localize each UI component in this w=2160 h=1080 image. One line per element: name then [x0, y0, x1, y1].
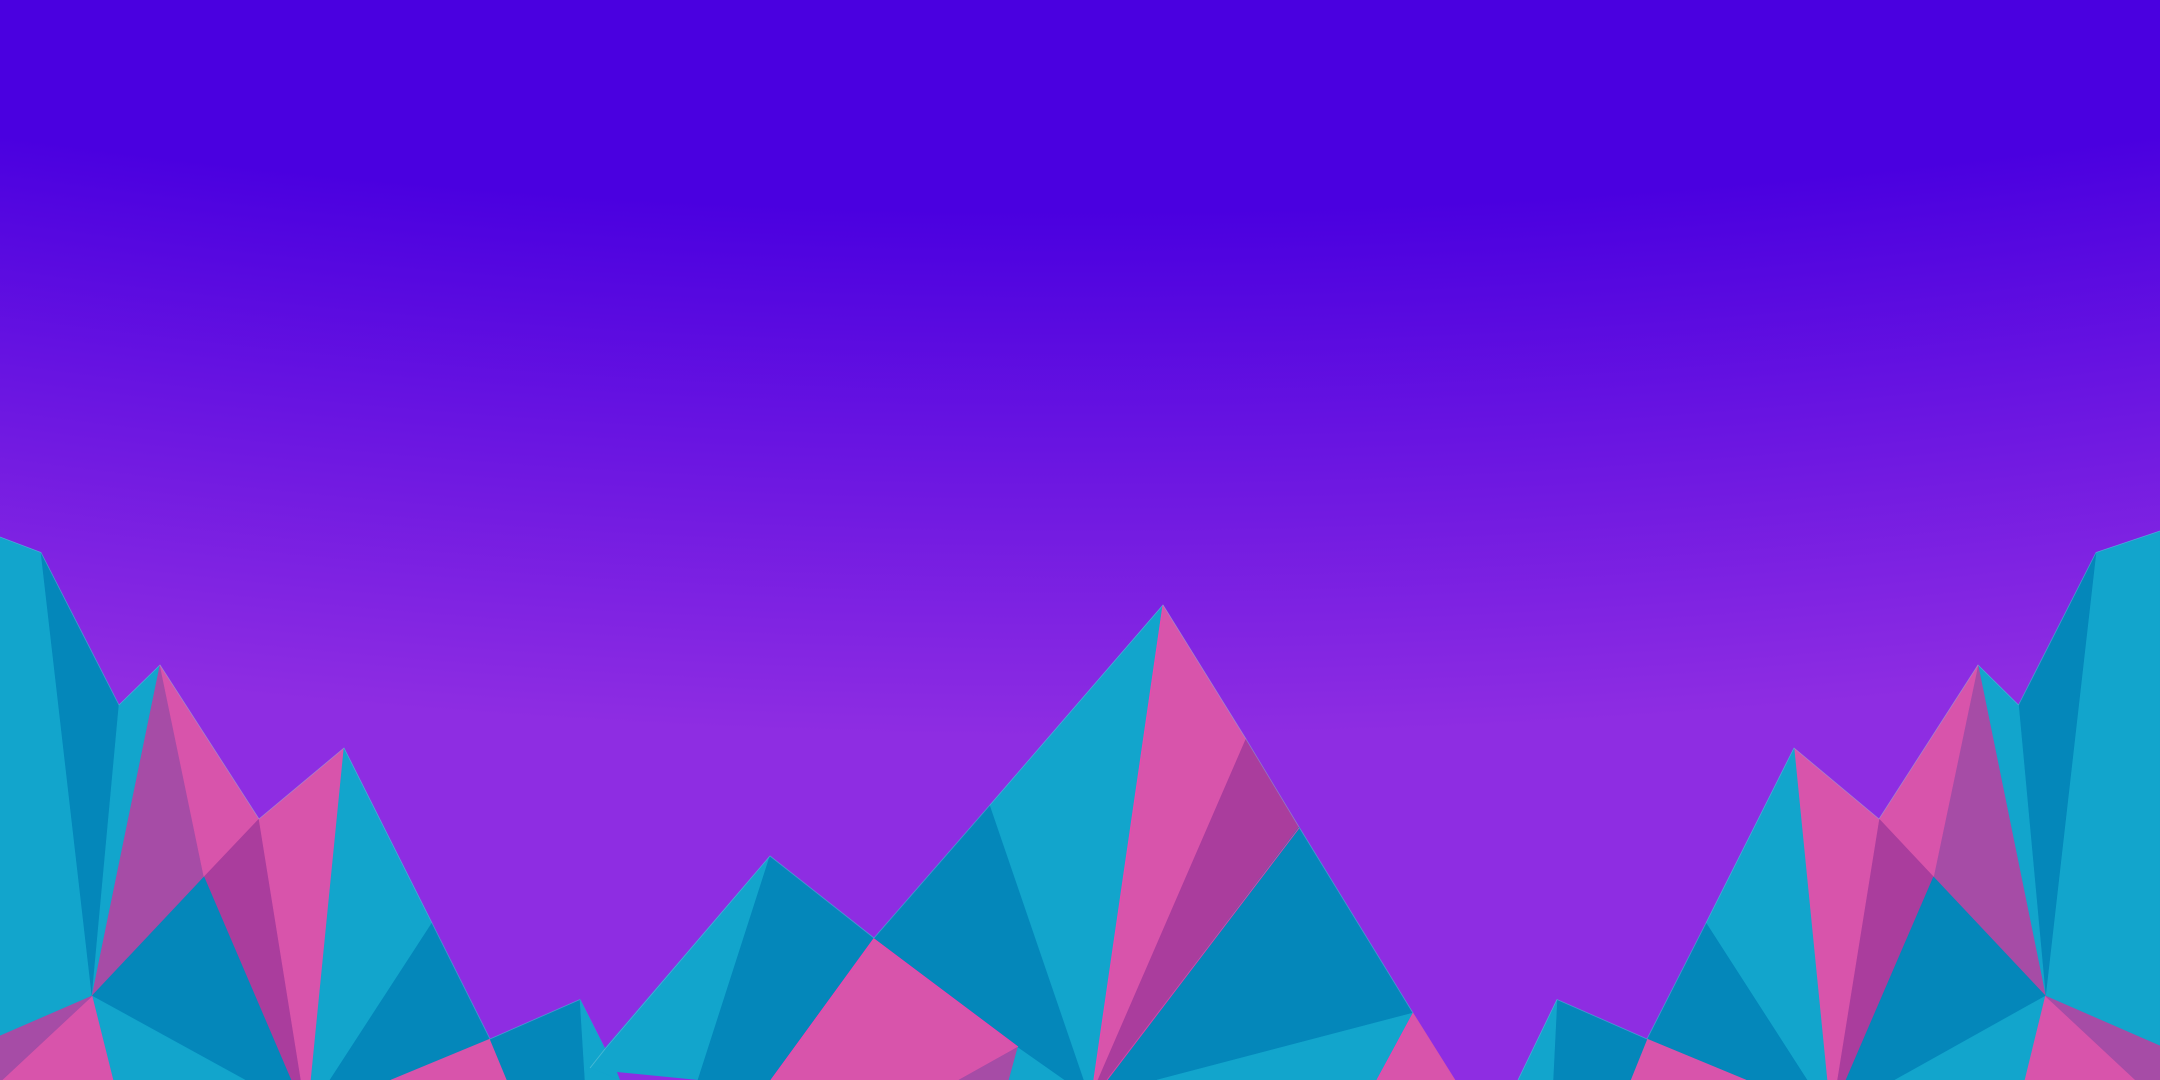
mountains: right range: [1518, 531, 2160, 1080]
mountains: central range: [580, 605, 1455, 1080]
mountains: left range: [0, 537, 605, 1080]
